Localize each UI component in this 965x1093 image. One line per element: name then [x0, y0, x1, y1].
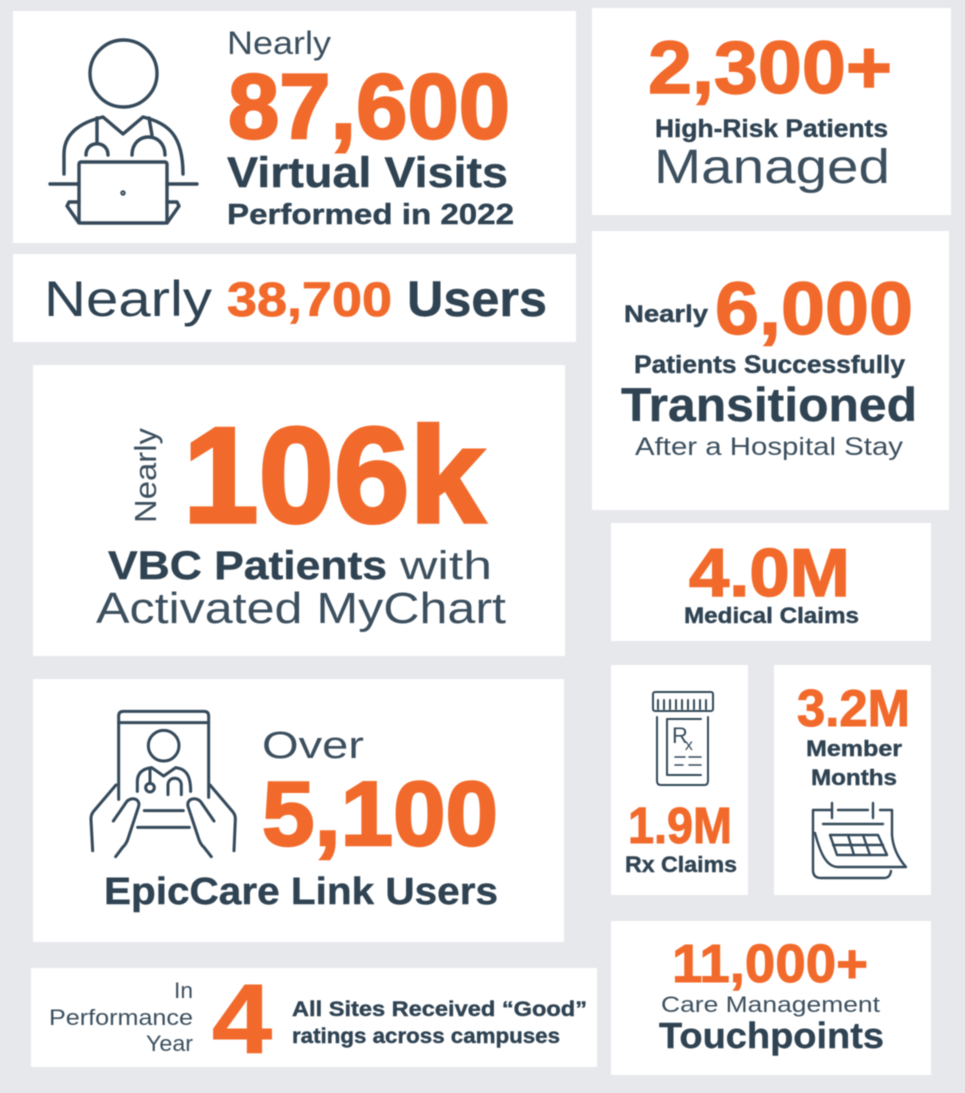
text: Virtual Visits: Virtual Visits	[227, 149, 508, 197]
stat: 38,700: 38,700	[227, 274, 392, 327]
text: Activated MyChart: Activated MyChart	[96, 584, 506, 633]
text: Member Months	[806, 736, 902, 790]
stat: 4.0M: 4.0M	[689, 535, 850, 611]
stat: 11,000+: 11,000+	[672, 934, 868, 994]
panel: care management touchpoints	[611, 921, 931, 1075]
panel: medical claims	[611, 523, 931, 641]
stat: 3.2M: 3.2M	[797, 680, 910, 738]
text: VBC Patients with	[108, 544, 492, 588]
text: rotated Nearly: Nearly	[128, 427, 163, 523]
text: Managed: Managed	[654, 141, 890, 194]
stat: 106k: 106k	[183, 399, 485, 551]
text: After a Hospital Stay: After a Hospital Stay	[635, 433, 904, 461]
text: High-Risk Patients: High-Risk Patients	[655, 115, 888, 143]
text: Care Management: Care Management	[661, 992, 880, 1017]
text: Over: Over	[262, 725, 364, 767]
text: Nearly: Nearly	[624, 301, 709, 328]
text: Rx Claims: Rx Claims	[625, 852, 737, 877]
text: Transitioned: Transitioned	[621, 378, 917, 431]
panel: EpicCare Link	[33, 679, 564, 942]
text: Medical Claims: Medical Claims	[684, 603, 859, 628]
stat: 5,100: 5,100	[262, 764, 498, 865]
text: Performed in 2022: Performed in 2022	[227, 199, 514, 231]
icon: prescription bottle: x	[685, 737, 693, 754]
panel: users	[13, 254, 576, 342]
icon: calendar	[813, 803, 906, 878]
text: Member Months: Member	[806, 736, 902, 761]
text: Patients Successfully: Patients Successfully	[634, 351, 905, 379]
text: VBC Patients with: with	[399, 544, 492, 588]
icon: hands holding tablet with doctor	[91, 711, 235, 857]
text: In Performance Year: Year	[146, 1031, 193, 1056]
text: All Sites Received Good ratings: All Sites Received “Good”	[292, 998, 587, 1021]
stat: 87,600: 87,600	[228, 56, 510, 158]
icon: prescription bottle	[653, 692, 713, 785]
panel: virtual visits	[13, 11, 576, 243]
stat: 6,000: 6,000	[715, 267, 913, 350]
stat: 4: 4	[212, 964, 272, 1074]
text: Nearly: Nearly	[227, 25, 331, 61]
text: All Sites Received Good ratings: ratings across campuses	[292, 1025, 560, 1048]
text: Member Months: Months	[811, 765, 897, 790]
text: In Performance Year: Performance	[49, 1005, 193, 1030]
text: In Performance Year	[49, 978, 193, 1056]
panel: transitioned patients	[592, 231, 949, 510]
panel: high-risk patients	[592, 8, 951, 215]
text: Users: Users	[407, 271, 547, 327]
panel: MyChart patients	[33, 365, 565, 656]
text: Touchpoints: Touchpoints	[659, 1015, 884, 1056]
stat: 2,300+: 2,300+	[648, 26, 892, 109]
icon: prescription bottle: R	[672, 723, 688, 748]
text: EpicCare Link Users: EpicCare Link Users	[104, 871, 498, 913]
icon: doctor at laptop	[50, 40, 197, 223]
text: VBC Patients with: VBC Patients	[108, 544, 387, 588]
panel: member months	[774, 665, 931, 895]
text: Nearly: Nearly	[44, 271, 212, 327]
panel: performance year	[31, 964, 597, 1074]
text: All Sites Received Good ratings	[292, 998, 587, 1048]
panel: Rx claims	[611, 665, 748, 895]
text: In Performance Year: In	[174, 978, 193, 1003]
stat: 1.9M: 1.9M	[628, 797, 732, 854]
